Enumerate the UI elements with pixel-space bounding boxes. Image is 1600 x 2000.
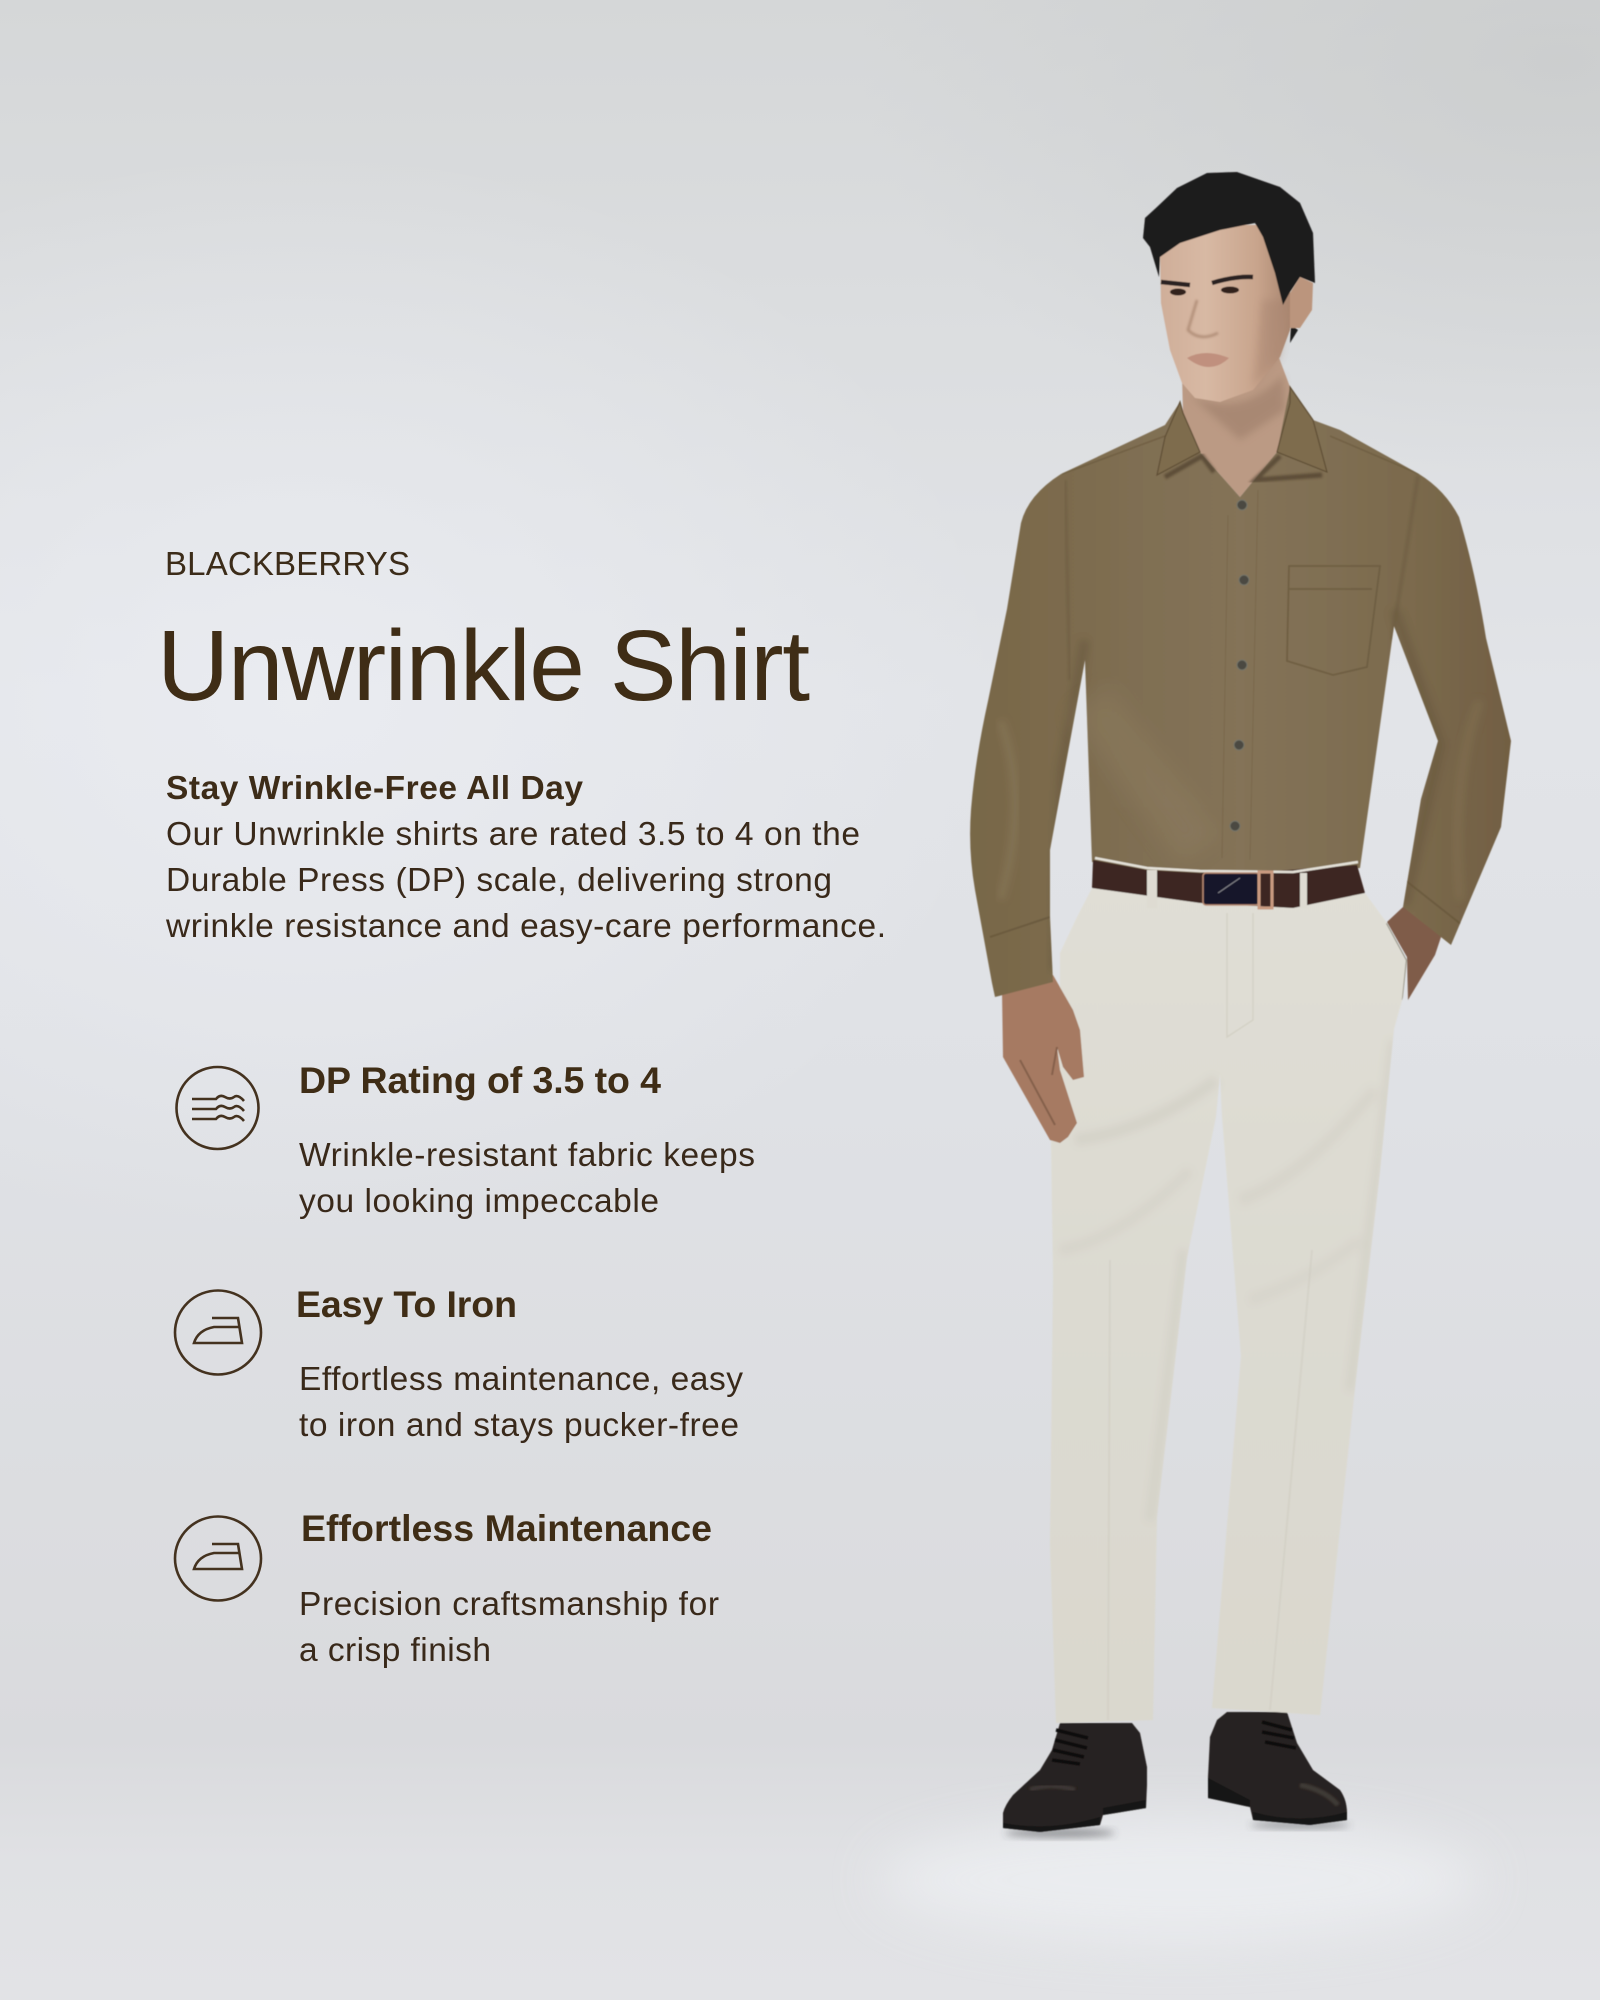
intro body: Durable Press (DP) scale, delivering strong bbox=[166, 862, 832, 899]
text: DP rating bbox=[299, 1137, 755, 1220]
lips bbox=[1187, 353, 1229, 367]
buckle bbox=[1203, 872, 1272, 908]
icon: wrinkle-free waves bbox=[176, 1067, 258, 1149]
shoes bbox=[1003, 1712, 1347, 1832]
pocket edge bbox=[1387, 923, 1407, 1000]
intro body bbox=[165, 816, 886, 945]
buttons bbox=[1230, 500, 1249, 831]
text: effortless maintenance: a crisp finish bbox=[299, 1632, 491, 1669]
ear bbox=[1290, 277, 1313, 328]
pocket bbox=[1287, 566, 1380, 675]
left hand bbox=[1002, 975, 1084, 1143]
intro heading: Stay Wrinkle-Free All Day bbox=[166, 770, 583, 807]
title: Unwrinkle Shirt bbox=[157, 610, 810, 722]
text: effortless maintenance bbox=[299, 1586, 719, 1669]
heading: easy to iron: Easy To Iron bbox=[296, 1283, 517, 1325]
belt bbox=[1092, 858, 1365, 908]
intro body: wrinkle resistance and easy-care performance. bbox=[165, 908, 886, 945]
floor shadow bbox=[1005, 1828, 1115, 1838]
head and face bbox=[1143, 172, 1315, 402]
intro body: Our Unwrinkle shirts are rated 3.5 to 4 on the bbox=[166, 816, 860, 853]
trousers bbox=[1050, 888, 1407, 1723]
feature: effortless maintenance bbox=[175, 1507, 719, 1669]
face shadow bbox=[1253, 300, 1288, 388]
collar shadow bbox=[1165, 456, 1322, 480]
intro text block bbox=[165, 770, 886, 945]
neck shadow bbox=[1190, 375, 1285, 440]
heading: effortless maintenance: Effortless Maintenance bbox=[301, 1507, 712, 1549]
text: easy to iron bbox=[299, 1361, 743, 1444]
text: DP rating: you looking impeccable bbox=[299, 1183, 659, 1220]
crotch crease bbox=[1216, 1073, 1222, 1117]
model figure bbox=[970, 172, 1511, 1838]
nose bbox=[1188, 300, 1218, 337]
eyes bbox=[1170, 288, 1186, 296]
shirt bbox=[970, 387, 1511, 997]
placket bbox=[1222, 490, 1258, 860]
collar bbox=[1157, 387, 1327, 475]
hair tail below ear bbox=[1290, 325, 1298, 343]
eyebrows bbox=[1161, 277, 1253, 285]
hair bbox=[1143, 172, 1315, 305]
text: effortless maintenance: Precision craftsmanship for bbox=[299, 1586, 719, 1623]
text: easy to iron: to iron and stays pucker-free bbox=[299, 1407, 739, 1444]
icon: iron bbox=[175, 1516, 261, 1600]
fly bbox=[1227, 913, 1253, 1037]
right hand in pocket bbox=[1387, 907, 1445, 1000]
face bbox=[1160, 225, 1290, 402]
brand name: BLACKBERRYS bbox=[165, 545, 410, 582]
heading: DP rating: DP Rating of 3.5 to 4 bbox=[299, 1059, 661, 1101]
text: easy to iron: Effortless maintenance, easy bbox=[299, 1361, 743, 1398]
feature: DP rating bbox=[176, 1059, 755, 1220]
right shoe shadow bbox=[1250, 1821, 1350, 1829]
shoe laces bbox=[1052, 1722, 1296, 1764]
feature: easy to iron bbox=[175, 1283, 743, 1444]
icon: iron bbox=[175, 1290, 261, 1374]
text: DP rating: Wrinkle-resistant fabric keeps bbox=[299, 1137, 755, 1174]
neck bbox=[1182, 355, 1290, 497]
